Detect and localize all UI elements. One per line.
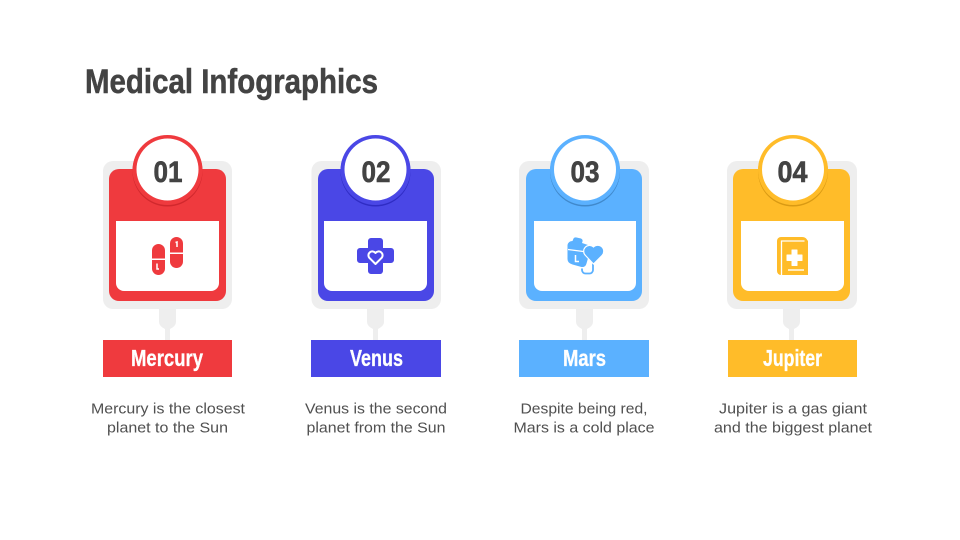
label text: Jupiter xyxy=(763,345,822,371)
label bar xyxy=(519,340,649,377)
description: Venus is the second xyxy=(305,402,447,418)
panel: Mars xyxy=(514,135,654,436)
bag body xyxy=(526,169,642,301)
number badge: 02 xyxy=(362,156,390,189)
label text: Mars xyxy=(563,345,606,371)
bag body xyxy=(109,169,226,301)
panel: Mercury xyxy=(91,135,245,436)
icon: pills xyxy=(152,237,183,275)
bag backing xyxy=(519,161,649,309)
number badge: 03 xyxy=(570,156,600,189)
description: Jupiter is a gas giant xyxy=(719,402,867,418)
connector xyxy=(783,309,800,340)
white window xyxy=(534,221,636,291)
icon: medical cross with heart xyxy=(357,238,394,274)
icon: medical book xyxy=(777,237,808,275)
panel: Venus xyxy=(305,135,447,436)
number badge xyxy=(340,135,410,206)
bag backing xyxy=(312,161,441,309)
bag backing xyxy=(103,161,232,309)
number badge: 01 xyxy=(154,156,182,189)
description xyxy=(305,402,447,436)
label bar xyxy=(728,340,857,377)
connector xyxy=(159,309,176,340)
number badge xyxy=(132,135,202,206)
description xyxy=(514,402,654,436)
icon: clipboard and stethoscope with heart xyxy=(568,237,604,274)
description: planet from the Sun xyxy=(306,420,446,436)
bag body xyxy=(733,169,850,301)
connector xyxy=(576,309,593,340)
white window xyxy=(116,221,219,291)
description: Despite being red, xyxy=(520,402,648,418)
number badge xyxy=(550,135,620,206)
white window xyxy=(741,221,844,291)
bag body xyxy=(318,169,434,301)
description xyxy=(91,402,245,436)
number badge: 04 xyxy=(778,156,808,189)
description xyxy=(714,402,872,436)
description: Mercury is the closest xyxy=(91,402,245,418)
description: planet to the Sun xyxy=(107,420,228,436)
description: Mars is a cold place xyxy=(514,420,654,436)
label text: Venus xyxy=(350,345,403,371)
label bar xyxy=(103,340,232,377)
connector xyxy=(367,309,384,340)
description: and the biggest planet xyxy=(714,420,872,436)
title: Medical Infographics xyxy=(85,63,378,101)
bag backing xyxy=(727,161,857,309)
white window xyxy=(324,221,427,291)
label bar xyxy=(311,340,441,377)
label text: Mercury xyxy=(131,345,203,371)
number badge xyxy=(758,135,828,206)
panel: Jupiter xyxy=(714,135,872,436)
